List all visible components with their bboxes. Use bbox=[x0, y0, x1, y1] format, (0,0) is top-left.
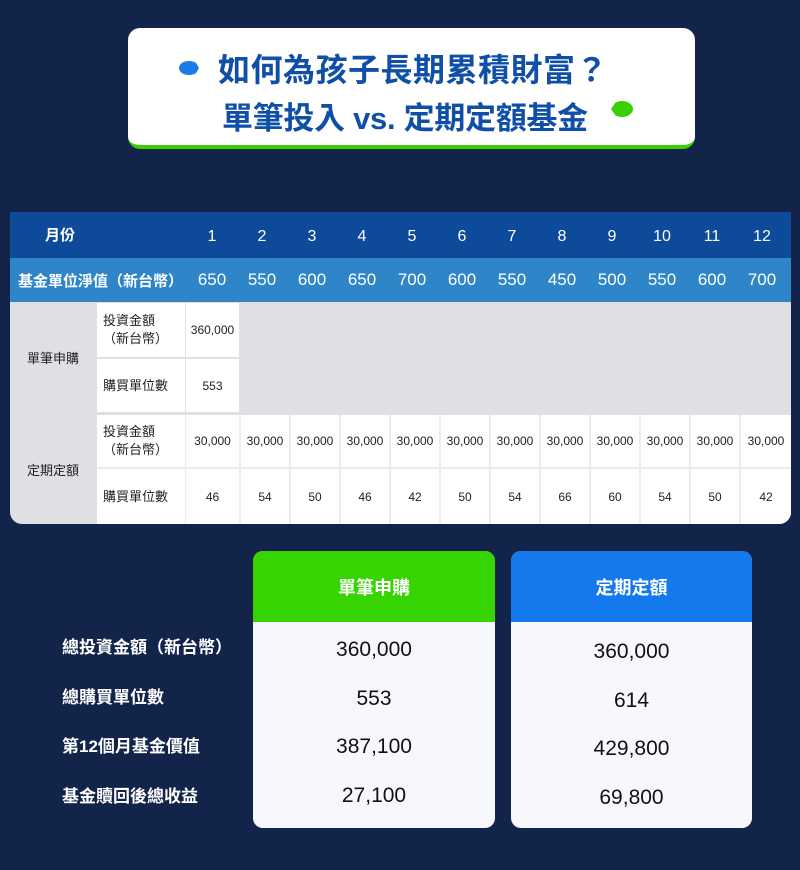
header row: months: 8 bbox=[558, 228, 566, 245]
table: 30,000 bbox=[297, 434, 333, 448]
table: 30,000 bbox=[194, 434, 231, 448]
NAV row: 700 bbox=[748, 270, 776, 289]
card: DCA: 69,800 bbox=[599, 786, 664, 809]
table: 30,000 bbox=[547, 434, 583, 448]
header row: months: 月份 bbox=[45, 226, 75, 244]
header row: months: 3 bbox=[308, 228, 316, 245]
table: 46 bbox=[358, 490, 372, 504]
NAV row: 650 bbox=[198, 270, 226, 289]
table: 50 bbox=[708, 490, 722, 504]
card: lump sum: 387,100 bbox=[336, 735, 412, 758]
icon: green leaf bbox=[611, 101, 633, 117]
table: 30,000 bbox=[748, 434, 784, 448]
NAV row bbox=[10, 258, 791, 302]
NAV row: 550 bbox=[248, 270, 276, 289]
NAV row: 550 bbox=[498, 270, 526, 289]
summary row labels: 基金贖回後總收益 bbox=[62, 786, 198, 806]
table: 66 bbox=[558, 490, 572, 504]
summary row labels: 第12個月基金價值 bbox=[62, 736, 200, 756]
table: 30,000 bbox=[697, 434, 733, 448]
table: 投資金額 bbox=[103, 424, 155, 439]
table: 360,000 bbox=[191, 323, 234, 337]
table: 30,000 bbox=[247, 434, 283, 448]
table: 42 bbox=[759, 490, 773, 504]
header row: months: 6 bbox=[458, 228, 466, 245]
lump sum rows: 單筆申購 bbox=[27, 351, 79, 366]
table: 46 bbox=[206, 490, 219, 504]
NAV row: 550 bbox=[648, 270, 676, 289]
table: 投資金額 bbox=[103, 313, 155, 328]
table: 54 bbox=[658, 490, 672, 504]
header row: months: 10 bbox=[653, 228, 671, 245]
NAV row: 600 bbox=[448, 270, 476, 289]
NAV row: 700 bbox=[398, 270, 426, 289]
NAV row: 650 bbox=[348, 270, 376, 289]
header row: months: 7 bbox=[508, 228, 516, 245]
header row: months: 12 bbox=[753, 228, 771, 245]
table: 30,000 bbox=[397, 434, 433, 448]
table: 553 bbox=[202, 378, 223, 392]
summary row labels: 總購買單位數 bbox=[62, 688, 164, 706]
icon: blue leaf bbox=[179, 61, 199, 75]
title box bbox=[128, 28, 695, 149]
card: lump sum: 553 bbox=[356, 687, 392, 710]
table: 30,000 bbox=[447, 434, 483, 448]
card: lump sum bbox=[253, 551, 495, 828]
summary row labels: 總投資金額（新台幣） bbox=[62, 638, 232, 656]
card: lump sum: 單筆申購 bbox=[338, 578, 410, 598]
card: lump sum: 360,000 bbox=[336, 638, 412, 661]
summary row labels bbox=[62, 638, 232, 806]
NAV row: 450 bbox=[548, 270, 576, 289]
title line 2: 單筆投入 vs. 定期定額基金 bbox=[222, 101, 588, 136]
header row: months bbox=[10, 212, 791, 258]
header row: months: 2 bbox=[258, 228, 266, 245]
table: 54 bbox=[258, 490, 272, 504]
header row: months: 5 bbox=[408, 228, 416, 245]
table: 60 bbox=[608, 490, 622, 504]
header row: months: 4 bbox=[358, 228, 366, 245]
card: lump sum: 27,100 bbox=[342, 784, 406, 807]
table: 30,000 bbox=[497, 434, 533, 448]
table bbox=[10, 212, 791, 524]
table: （新台幣） bbox=[103, 331, 168, 346]
card: DCA: 定期定額 bbox=[596, 578, 668, 598]
NAV row: 500 bbox=[598, 270, 626, 289]
table: 42 bbox=[408, 490, 422, 504]
table: 54 bbox=[508, 490, 522, 504]
table: 購買單位數 bbox=[103, 378, 168, 392]
table: 30,000 bbox=[647, 434, 683, 448]
NAV row: 600 bbox=[298, 270, 326, 289]
header row: months: 9 bbox=[608, 228, 616, 245]
card: DCA bbox=[511, 551, 752, 828]
table: 30,000 bbox=[597, 434, 633, 448]
table: 購買單位數 bbox=[103, 488, 168, 504]
table: （新台幣） bbox=[103, 442, 168, 457]
card: DCA: 614 bbox=[614, 689, 649, 712]
DCA rows: 定期定額 bbox=[27, 462, 79, 478]
header row: months: 11 bbox=[704, 228, 720, 245]
table: 30,000 bbox=[347, 434, 383, 448]
header row: months: 1 bbox=[208, 228, 216, 245]
NAV row: 600 bbox=[698, 270, 726, 289]
NAV row: 基金單位淨值（新台幣） bbox=[18, 272, 183, 290]
title line 1: 如何為孩子長期累積財富？ bbox=[218, 52, 608, 88]
table: 50 bbox=[308, 490, 322, 504]
card: DCA: 360,000 bbox=[594, 640, 669, 663]
card: DCA: 429,800 bbox=[594, 737, 669, 760]
table: 50 bbox=[458, 490, 472, 504]
